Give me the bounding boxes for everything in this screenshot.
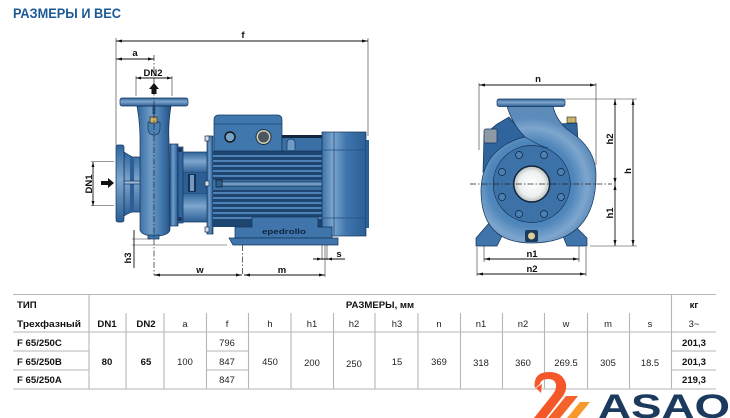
table header: n	[436, 318, 442, 329]
table values: 100	[177, 356, 193, 367]
table header: РАЗМЕРЫ, мм	[346, 300, 414, 311]
dimension DN2	[136, 68, 172, 96]
dimension s: s	[336, 249, 342, 260]
dimension n	[479, 74, 596, 165]
front view dimension lines	[470, 74, 637, 276]
motor cooling fins	[213, 151, 323, 227]
icon: orange swan mark	[534, 372, 590, 418]
front pump flange with bolts	[493, 146, 570, 242]
pump inlet flange	[116, 145, 141, 222]
dimension w	[154, 245, 242, 276]
dimension w: w	[195, 265, 204, 276]
table weights: 219,3	[682, 375, 706, 386]
dimension f	[116, 30, 368, 146]
table type column: F 65/250C	[17, 338, 62, 349]
table header: ТИП	[17, 300, 37, 311]
table values: 847	[219, 356, 235, 367]
dimension h3: h3	[123, 252, 134, 264]
table values: 18.5	[641, 357, 659, 368]
table header: DN2	[136, 319, 156, 330]
table values	[102, 337, 659, 385]
motor base with brand: epedrollo	[262, 227, 307, 236]
table header: n2	[518, 318, 528, 329]
table weights	[682, 338, 706, 386]
table weights: 201,3	[682, 338, 706, 349]
motor base with brand	[229, 217, 338, 245]
table values: 450	[262, 356, 278, 367]
dimension n1	[484, 246, 579, 262]
dimension DN1	[84, 162, 114, 206]
table values: 369	[431, 356, 447, 367]
ASAO logo	[534, 372, 730, 418]
motor flange	[205, 136, 213, 234]
dimension m	[244, 245, 327, 277]
table values: 318	[473, 357, 489, 368]
table header: h1	[307, 318, 317, 329]
table type column: F 65/250B	[17, 357, 62, 368]
dimension h1	[590, 184, 637, 246]
pump volute body	[120, 98, 188, 239]
dimension DN2: DN2	[143, 68, 163, 79]
table header: a	[182, 318, 188, 329]
dimension n2: n2	[526, 264, 538, 275]
table values: 80	[102, 357, 112, 368]
table values: 269.5	[554, 357, 578, 368]
table type column	[17, 338, 62, 386]
front view pump drawing	[476, 99, 596, 246]
table header: Трехфазный	[17, 319, 81, 330]
centre line	[153, 55, 155, 275]
front volute casing	[481, 99, 596, 243]
dimension h	[623, 99, 634, 246]
table header: кг	[690, 300, 698, 311]
arrow: inlet flow	[101, 178, 114, 188]
dimension a: a	[132, 48, 138, 59]
table values: 847	[219, 374, 235, 385]
dimension n: n	[535, 74, 541, 85]
table header: w	[562, 318, 570, 329]
motor fan cover	[322, 132, 369, 236]
dimension h2	[565, 99, 637, 184]
table values: 360	[515, 357, 531, 368]
dimension m: m	[278, 265, 286, 276]
table header: h	[267, 318, 273, 329]
table values: 200	[304, 357, 320, 368]
table weights: 201,3	[682, 357, 706, 368]
title: РАЗМЕРЫ И ВЕС	[13, 6, 121, 21]
table type column: F 65/250A	[17, 375, 62, 386]
specification table	[13, 294, 716, 389]
dimension n1: n1	[526, 249, 538, 260]
table values: 796	[219, 337, 235, 348]
table header: m	[604, 318, 612, 329]
table values: 305	[600, 357, 616, 368]
table header: h2	[349, 318, 359, 329]
dimension s	[313, 249, 345, 260]
centre line	[470, 183, 612, 185]
dimension h: h	[623, 168, 634, 174]
dimension f: f	[241, 30, 245, 41]
table header: n1	[476, 318, 486, 329]
table header	[17, 300, 700, 330]
table values: 250	[346, 358, 362, 369]
dimension a	[116, 48, 154, 60]
table grid	[13, 294, 716, 389]
shaft housing and coupling	[170, 144, 208, 226]
table header: f	[226, 318, 229, 329]
table values: 65	[141, 357, 152, 368]
table header: 3~	[689, 318, 700, 329]
terminal box	[214, 115, 322, 151]
side view pump drawing	[116, 98, 369, 245]
table header: DN1	[97, 319, 117, 330]
dimension n2	[477, 247, 586, 276]
side view dimension lines	[84, 30, 368, 277]
dimension h1: h1	[605, 207, 616, 219]
dimension DN1: DN1	[84, 174, 95, 194]
table header: h3	[392, 318, 402, 329]
table header: s	[648, 318, 653, 329]
table values: 15	[392, 356, 402, 367]
dimension h2: h2	[605, 133, 616, 145]
motor behind volute	[483, 117, 578, 172]
arrow: discharge flow	[149, 83, 159, 94]
front feet	[476, 222, 587, 246]
dimension h3	[123, 230, 227, 268]
